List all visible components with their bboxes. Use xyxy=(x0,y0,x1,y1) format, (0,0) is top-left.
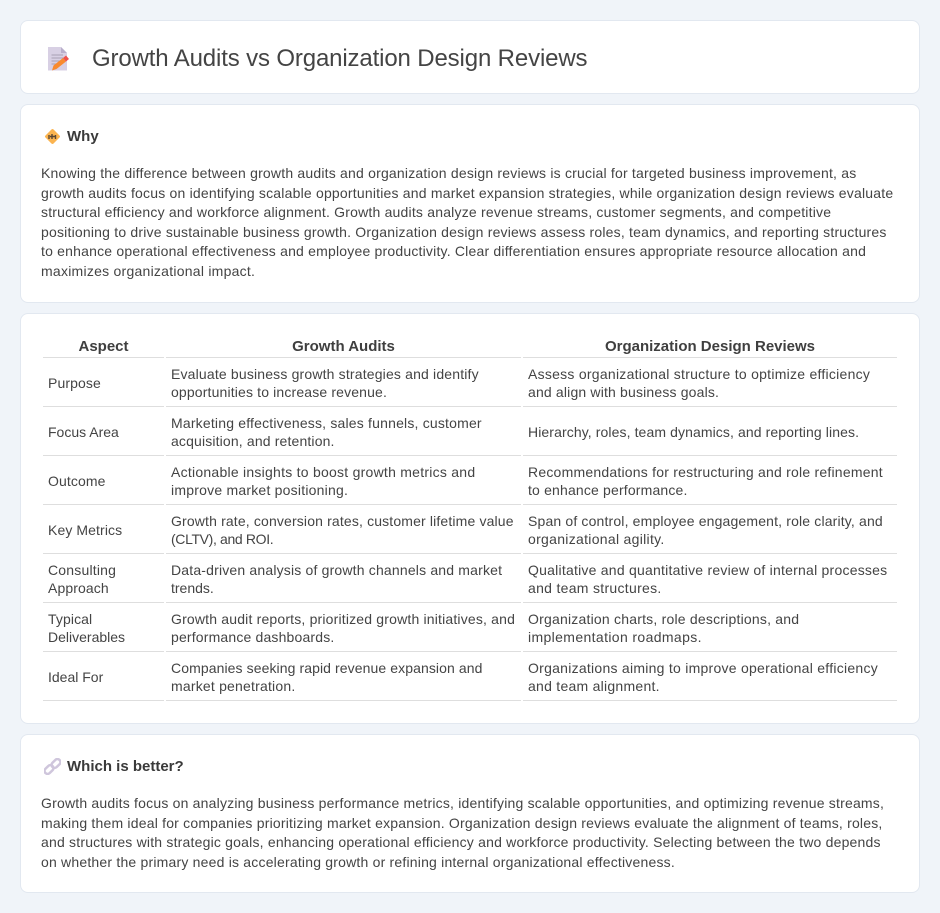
row: consulting approach: Qualitative and quantitative review of internal processes xyxy=(528,562,887,578)
row: consulting approach: and team structures. xyxy=(528,580,662,596)
icon: diamond warning sign xyxy=(45,129,60,144)
row: typical deliverables: Organization charts, role descriptions, and xyxy=(528,611,799,627)
row: typical deliverables xyxy=(48,611,799,645)
row: key metrics: Span of control, employee engagement, role clarity, and xyxy=(528,513,883,529)
row: ideal for: Ideal For xyxy=(48,669,103,685)
row: focus area: Hierarchy, roles, team dynamics, and reporting lines. xyxy=(528,424,859,440)
text block: why: positioning to drive sustainable business growth. Organization design reviews assess roles, team dynamics, and reporting structures xyxy=(41,224,887,240)
text block: which is better xyxy=(41,795,884,870)
text block: why: structural efficiency and workforce alignment. Growth audits analyze revenue streams, customer segments, and competitive xyxy=(41,204,831,220)
row: purpose: Evaluate business growth strategies and identify xyxy=(171,366,479,382)
row: typical deliverables: performance dashboards. xyxy=(171,629,334,645)
row: focus area: Focus Area xyxy=(48,424,119,440)
row: ideal for xyxy=(48,660,878,694)
panel: why xyxy=(20,104,920,303)
row: focus area xyxy=(48,415,859,449)
row: key metrics: Growth rate, conversion rates, customer lifetime value xyxy=(171,513,514,529)
panel: which is better xyxy=(20,734,920,893)
text block: why: to enhance operational effectiveness and employee productivity. Clear differentiation ensures appropriate resource allocation and xyxy=(41,243,866,259)
text block: why: growth audits focus on identifying scalable opportunities and market expansion strategies, while organization design reviews evaluate xyxy=(41,184,893,200)
text block: which is better: on whether the primary need is accelerating growth or refining internal organizational effectiveness. xyxy=(41,854,675,870)
table header row: Organization Design Reviews xyxy=(605,338,815,355)
row: consulting approach: trends. xyxy=(171,580,214,596)
row: consulting approach: Approach xyxy=(48,580,109,596)
row: purpose: Assess organizational structure to optimize efficiency xyxy=(528,366,870,382)
row: consulting approach: Data-driven analysis of growth channels and market xyxy=(171,562,502,578)
row: outcome: to enhance performance. xyxy=(528,482,688,498)
heading: why: Why xyxy=(67,128,99,145)
text block: why: Knowing the difference between growth audits and organization design reviews is crucial for targeted business improvement, as xyxy=(41,165,856,181)
row: consulting approach xyxy=(48,562,887,596)
text block: why: maximizes organizational impact. xyxy=(41,262,255,278)
row: outcome: Recommendations for restructuring and role refinement xyxy=(528,464,883,480)
row: outcome: improve market positioning. xyxy=(171,482,348,498)
panel: header xyxy=(20,20,920,94)
row: ideal for: market penetration. xyxy=(171,678,295,694)
row: focus area: acquisition, and retention. xyxy=(171,433,335,449)
row: purpose: Purpose xyxy=(48,375,101,391)
row: typical deliverables: Growth audit reports, prioritized growth initiatives, and xyxy=(171,611,515,627)
text block: which is better: and structures with strategic goals, enhancing operational efficiency and workforce productivity. Selecting between the two depends xyxy=(41,834,881,850)
icon: chain link xyxy=(44,758,61,775)
row: typical deliverables: Deliverables xyxy=(48,629,125,645)
table header row: Growth Audits xyxy=(292,338,395,355)
row: outcome: Actionable insights to boost growth metrics and xyxy=(171,464,475,480)
text block: which is better: making them ideal for companies prioritizing market expansion. Organization design reviews evaluate the alignment of teams, roles, xyxy=(41,814,883,830)
table header row xyxy=(78,338,815,355)
heading: which is better: Which is better? xyxy=(67,758,184,775)
row: ideal for: Organizations aiming to improve operational efficiency xyxy=(528,660,878,676)
row: typical deliverables: Typical xyxy=(48,611,92,627)
panel: comparison table xyxy=(20,313,920,724)
row: purpose: opportunities to increase revenue. xyxy=(171,384,387,400)
row: outcome xyxy=(48,464,883,498)
title: Growth Audits vs Organization Design Reviews xyxy=(92,45,587,72)
row: key metrics: Key Metrics xyxy=(48,522,122,538)
row: typical deliverables: implementation roadmaps. xyxy=(528,629,702,645)
table header row: Aspect xyxy=(78,338,129,355)
row: consulting approach: Consulting xyxy=(48,562,116,578)
row: ideal for: Companies seeking rapid revenue expansion and xyxy=(171,660,482,676)
row: purpose: and align with business goals. xyxy=(528,384,719,400)
text block: why xyxy=(41,165,893,279)
row: key metrics: organizational agility. xyxy=(528,531,665,547)
row: ideal for: and team alignment. xyxy=(528,678,660,694)
row: key metrics: (CLTV), and ROI. xyxy=(171,531,273,547)
row: outcome: Outcome xyxy=(48,473,106,489)
row: focus area: Marketing effectiveness, sales funnels, customer xyxy=(171,415,482,431)
icon: document with pencil xyxy=(48,47,69,70)
text block: which is better: Growth audits focus on analyzing business performance metrics, identifying scalable opportunities, and optimizing revenue streams, xyxy=(41,795,884,811)
row: key metrics xyxy=(48,513,883,547)
row: purpose xyxy=(48,366,870,400)
